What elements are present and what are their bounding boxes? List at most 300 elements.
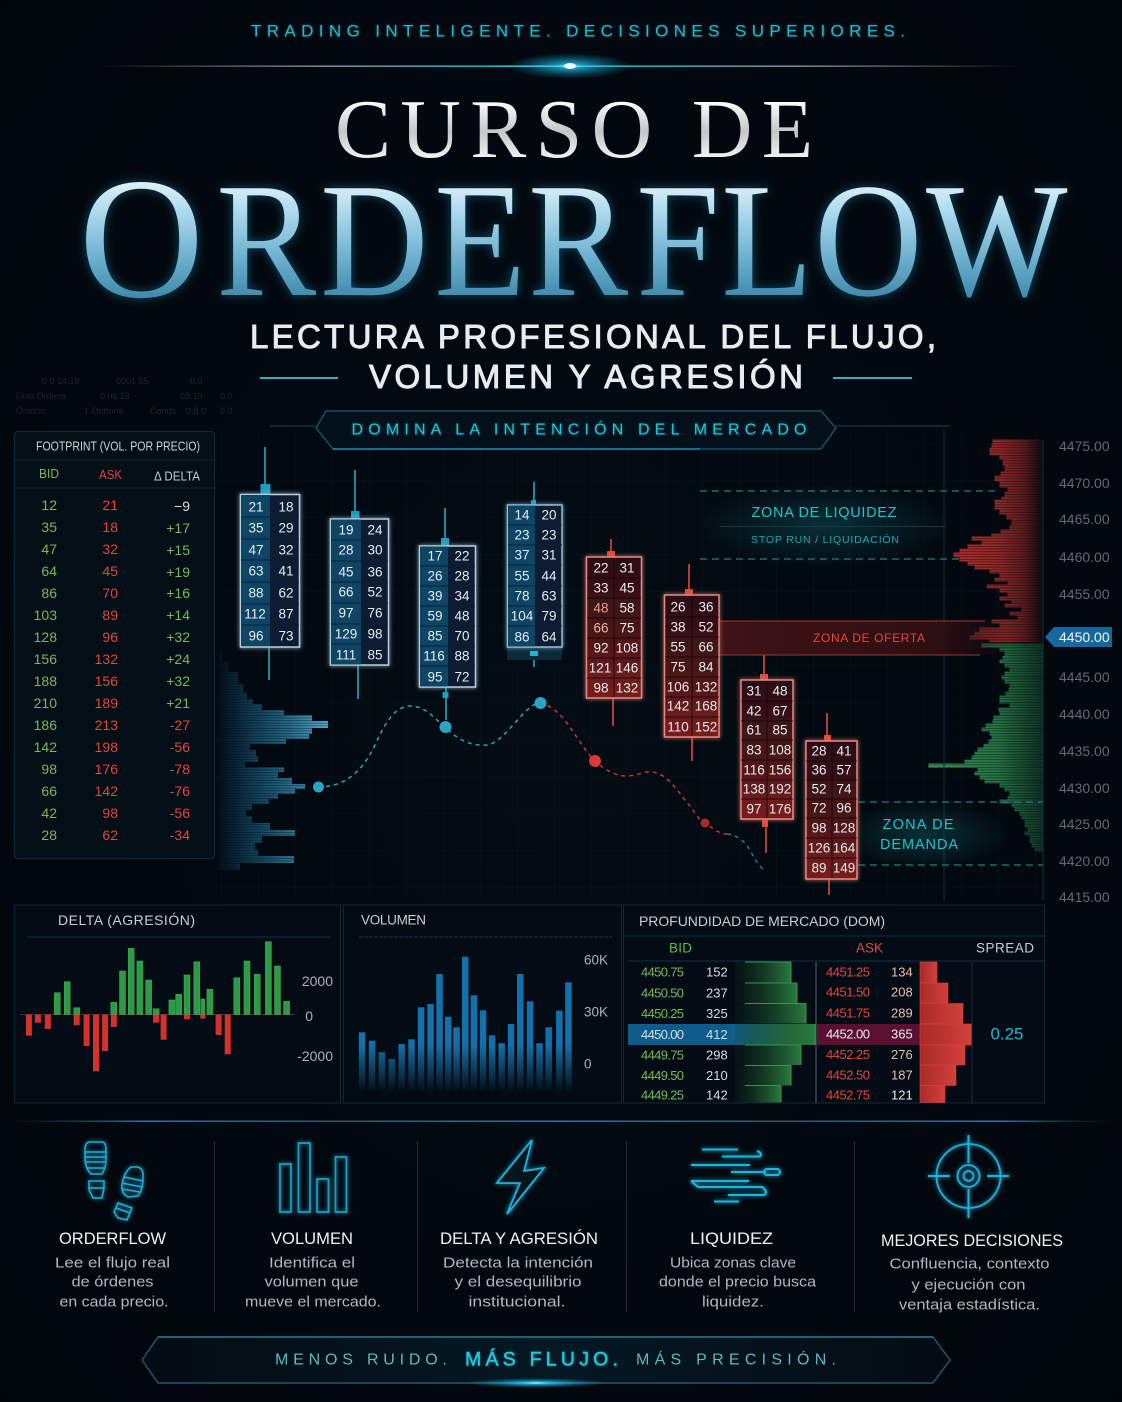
icon: footprints	[85, 1142, 143, 1220]
candle 5: 132	[616, 680, 638, 696]
current price tag: 4450.00	[1059, 629, 1110, 645]
footprint rows: +19	[166, 564, 190, 580]
footprint rows: 70	[102, 585, 118, 601]
candle 2: 36	[367, 564, 383, 580]
candle 8: 89	[811, 860, 827, 876]
candle 7: 48	[772, 684, 788, 698]
candle 5: 121	[589, 660, 611, 676]
candle 1: 63	[248, 564, 264, 578]
title: orderflow	[79, 144, 1068, 334]
volumen description	[245, 1254, 381, 1310]
candle 6: 106	[667, 680, 689, 694]
orderflow description: de órdenes	[72, 1274, 154, 1290]
candle 4: 44	[541, 568, 557, 584]
candle 6: 168	[695, 698, 717, 714]
dom ask rows: 4452.75	[826, 1088, 870, 1102]
footprint rows: +32	[166, 673, 190, 689]
footprint rows: 103	[34, 607, 57, 623]
bottom banner: MÁS FLUJO.	[465, 1348, 618, 1370]
candle 3: 85	[427, 628, 443, 644]
footprint rows: +24	[166, 651, 190, 667]
candle 8: 126	[808, 840, 830, 856]
candle 5	[586, 539, 642, 726]
right volume profile: supply	[954, 440, 1043, 642]
candle 5: 33	[593, 580, 609, 596]
candle 7: 156	[769, 762, 791, 778]
candle 3: 70	[454, 628, 470, 644]
footprint rows: 21	[102, 497, 118, 513]
candle 5: 58	[619, 600, 635, 616]
faint background ghost table: 0 ns 13	[100, 391, 130, 401]
subtitle: VOLUMEN Y AGRESIÓN	[369, 358, 803, 395]
candle 6: 75	[670, 660, 686, 674]
candle 2: 129	[335, 626, 357, 642]
candle 2: 19	[338, 522, 354, 538]
dom ask rows: 208	[891, 984, 913, 1000]
candle 2	[330, 470, 388, 699]
candle 3: 48	[454, 608, 470, 624]
candle 1: 62	[278, 586, 294, 600]
delta heading: DELTA Y AGRESIÓN	[440, 1229, 598, 1248]
volume axis labels: 0	[584, 1056, 592, 1072]
candle 1: 87	[278, 606, 294, 622]
footprint rows: -56	[170, 739, 190, 755]
footprint rows: 188	[34, 673, 57, 689]
panel: delta	[14, 905, 340, 1103]
candle 1: 41	[278, 564, 294, 578]
orderflow description: Lee el flujo real	[55, 1254, 170, 1272]
candle 8: 36	[811, 762, 827, 778]
icon: liquidity streaks	[691, 1150, 780, 1202]
banner: domina la intencion: DOMINA LA INTENCIÓN DEL MERCADO	[352, 420, 807, 438]
candle 6: 66	[698, 640, 714, 654]
footprint rows: -76	[170, 783, 190, 799]
footprint rows: 32	[102, 541, 118, 557]
zone: oferta: ZONA DE OFERTA	[813, 631, 925, 645]
candle 8: 164	[833, 840, 856, 856]
price axis labels: 4455.00	[1059, 586, 1110, 602]
candle 2: 30	[367, 542, 383, 558]
bottom banner: MÁS PRECISIÓN.	[636, 1350, 836, 1368]
candle 7: 176	[769, 802, 791, 816]
candle 8: 52	[811, 782, 827, 796]
faint background ghost table: Onidon	[16, 406, 45, 416]
dom ask rows: 134	[891, 964, 913, 980]
price axis labels: 4445.00	[1059, 669, 1110, 685]
footprint rows: 189	[95, 695, 118, 711]
footprint rows: 86	[41, 585, 57, 601]
volumen description: volumen que	[264, 1274, 358, 1290]
dom ask rows: 276	[891, 1047, 913, 1062]
candle 7: 108	[769, 742, 791, 758]
faint background ghost table: 0.0	[190, 376, 203, 386]
candle 2: 24	[367, 522, 383, 538]
candle 3: 22	[454, 548, 470, 564]
candle 6: 110	[667, 720, 689, 734]
candle 1: 47	[248, 542, 264, 558]
volumen heading: VOLUMEN	[361, 912, 426, 928]
subtitle	[250, 318, 936, 395]
dom ask rows: 4452.50	[826, 1068, 870, 1082]
title: orderflow: O	[814, 149, 923, 330]
candle 8: 72	[811, 800, 827, 816]
footprint rows: 45	[102, 563, 118, 579]
candle 6	[664, 564, 719, 761]
candle 4: 23	[514, 528, 530, 542]
delta description: institucional.	[468, 1294, 566, 1310]
footprint rows: 89	[102, 607, 118, 623]
price axis line	[944, 430, 1043, 900]
dom ask rows: 4451.25	[826, 964, 870, 980]
footprint rows: 35	[41, 519, 57, 535]
volumen heading: VOLUMEN	[271, 1230, 353, 1248]
dom ask rows: 4452.00	[826, 1026, 870, 1042]
candle 8: 74	[836, 782, 852, 796]
feature: orderflow	[55, 1142, 170, 1310]
footprint rows	[34, 497, 190, 843]
footprint rows: +17	[166, 520, 190, 536]
footprint column headers: BID	[39, 466, 59, 481]
title: orderflow: R	[528, 149, 629, 330]
footprint rows: 47	[41, 541, 57, 557]
dom bid rows: 4449.25	[641, 1088, 684, 1102]
candle 4: 31	[541, 548, 557, 562]
liquidez description	[659, 1254, 817, 1310]
zone: liquidez: STOP RUN / LIQUIDACIÓN	[751, 533, 899, 546]
dom bid rows: 210	[706, 1068, 728, 1083]
candle 4: 64	[541, 630, 557, 644]
candle 5: 98	[593, 680, 609, 696]
faint background ghost table: 0.0	[220, 406, 233, 416]
candle 8: 149	[833, 860, 855, 876]
delta red bars	[26, 1014, 231, 1071]
dom bid rows: 325	[706, 1006, 728, 1021]
right volume profile: demand	[929, 644, 1043, 851]
dom bid rows: 4450.75	[641, 964, 684, 980]
dom bid rows: 4450.25	[641, 1006, 684, 1021]
candle 1: 32	[278, 542, 294, 558]
bottom banner: MENOS RUIDO.	[275, 1352, 447, 1368]
zone: liquidez	[695, 483, 998, 567]
bid depth bars	[735, 962, 815, 1102]
candle 2: 97	[338, 606, 354, 620]
candle 6: 152	[695, 720, 717, 734]
banner: domina la intencion	[270, 411, 950, 449]
chart grid background	[215, 430, 1045, 900]
price axis labels: 4425.00	[1059, 816, 1110, 832]
mejores decisiones description: ventaja estadística.	[899, 1296, 1040, 1314]
candle 2: 28	[338, 542, 354, 558]
candle 1: 29	[278, 520, 294, 536]
footprint rows: 156	[34, 651, 57, 667]
footprint rows: 98	[41, 761, 57, 777]
faint background ghost table	[16, 376, 233, 416]
glowing top divider	[100, 53, 1020, 79]
price path: bullish dashed	[318, 703, 540, 787]
footprint rows: 213	[95, 717, 118, 733]
candle 4	[507, 482, 562, 667]
candle 5: 31	[619, 560, 635, 576]
volume axis labels: 60K	[584, 952, 608, 968]
feature: liquidez	[659, 1150, 817, 1310]
liquidez description: Ubica zonas clave	[670, 1254, 796, 1272]
liquidez heading: LIQUIDEZ	[690, 1230, 773, 1248]
faint background ghost table: 1 Oottons	[84, 406, 124, 416]
candle 4: 20	[541, 508, 557, 522]
zone: demanda: ZONA DE	[882, 817, 954, 833]
title: orderflow: D	[320, 149, 428, 330]
candle 5: 48	[593, 600, 609, 616]
footprint column headers: Δ DELTA	[154, 468, 200, 484]
candle 2: 85	[367, 648, 383, 662]
candle 8: 128	[833, 820, 855, 836]
candle 1: 73	[278, 628, 294, 644]
highlighted row	[628, 1024, 972, 1045]
candle 3: 28	[454, 568, 470, 584]
candle 7	[741, 655, 793, 853]
dom ask rows: 4451.50	[826, 984, 870, 1000]
bid bar edges	[745, 962, 815, 1102]
volumen description: mueve el mercado.	[245, 1294, 381, 1310]
liquidez description: donde el precio busca	[659, 1274, 817, 1290]
panel: footprint table	[14, 432, 214, 858]
delta axis labels: 0	[305, 1008, 313, 1024]
top tagline: TRADING INTELIGENTE. DECISIONES SUPERIORES.	[251, 22, 905, 40]
candle 1: 21	[248, 500, 264, 514]
footprint rows: 96	[102, 629, 118, 645]
dom bid rows: 4450.00	[641, 1027, 684, 1042]
candle 6: 26	[670, 600, 686, 614]
footprint rows: 198	[95, 739, 118, 755]
mejores decisiones description: Confluencia, contexto	[890, 1256, 1050, 1272]
title: orderflow: R	[216, 149, 317, 330]
footprint rows: -34	[170, 827, 190, 843]
title: orderflow: W	[926, 149, 1068, 330]
candle 4: 55	[514, 568, 530, 584]
candle 5: 66	[593, 620, 609, 636]
candle 3: 95	[427, 670, 443, 684]
candle 5: 75	[619, 620, 635, 636]
candle 8	[806, 713, 857, 895]
candle 2: 111	[336, 648, 356, 662]
candle 5: 92	[593, 640, 609, 656]
candle 6: 52	[698, 620, 714, 634]
footprint rows: 210	[34, 695, 57, 711]
candle 1: 18	[278, 500, 294, 514]
candle 7: 61	[746, 722, 762, 738]
orderflow description: en cada precio.	[60, 1294, 168, 1310]
footprint rows: +32	[166, 629, 190, 645]
delta description: y el desequilibrio	[454, 1274, 582, 1290]
delta green bars	[54, 942, 290, 1014]
panel: volumen	[344, 905, 622, 1103]
zone: liquidez: ZONA DE LIQUIDEZ	[752, 505, 897, 521]
price axis labels: 4465.00	[1059, 511, 1110, 527]
footprint rows: +16	[166, 585, 190, 601]
candle 1: 112	[244, 606, 266, 622]
bottom banner	[142, 1337, 950, 1388]
candle 4: 37	[514, 548, 530, 562]
mejores decisiones description	[890, 1256, 1050, 1314]
faint background ghost table: 0:8 0	[186, 406, 206, 416]
candle 4: 63	[541, 588, 557, 604]
feature column dividers	[214, 1141, 854, 1312]
candle 2: 66	[338, 584, 354, 600]
footprint rows: −9	[174, 498, 190, 514]
left volume profile	[215, 654, 328, 870]
price path: bearish dashed	[540, 703, 727, 834]
dom bid rows: 237	[706, 986, 728, 1000]
dom column headers: BID	[669, 940, 692, 956]
candle 6: 84	[698, 660, 714, 674]
features divider	[10, 1120, 1112, 1122]
icon: lightning bolt	[497, 1140, 544, 1214]
dom bid rows: 298	[706, 1048, 728, 1062]
candle 2: 45	[338, 564, 354, 580]
liquidez description: liquidez.	[702, 1294, 764, 1310]
title: curso de: CURSO DE	[335, 83, 813, 176]
delta axis labels: 2000	[302, 973, 333, 989]
left profile fine scan lines	[215, 654, 330, 870]
footprint rows: 18	[102, 519, 118, 535]
feature: volumen	[245, 1143, 381, 1310]
feature: mejores decisiones	[881, 1135, 1063, 1314]
candle 8: 41	[836, 744, 852, 758]
current price tag	[1045, 627, 1112, 647]
subtitle accent lines	[260, 377, 912, 379]
price axis labels: 4420.00	[1059, 853, 1110, 869]
zone: demanda	[840, 800, 1043, 870]
title: orderflow: F	[636, 149, 720, 330]
volume bars	[359, 957, 572, 1093]
candle 4: 104	[511, 608, 534, 624]
price axis labels: 4415.00	[1059, 889, 1110, 905]
candle 4: 23	[541, 528, 557, 542]
footprint heading: FOOTPRINT (VOL. POR PRECIO)	[36, 438, 200, 454]
price path nodes	[313, 697, 710, 828]
orderflow heading: ORDERFLOW	[59, 1230, 166, 1248]
candle 3	[420, 508, 476, 720]
dom bid rows: 152	[706, 964, 728, 980]
candle 4: 14	[514, 508, 530, 522]
footprint rows: 64	[41, 563, 57, 579]
dom ask rows: 289	[891, 1006, 913, 1020]
price axis labels: 4460.00	[1059, 549, 1110, 565]
dom bid rows	[641, 964, 728, 1102]
delta axis labels: -2000	[297, 1048, 333, 1064]
candle 3: 116	[423, 648, 445, 664]
candle 5: 22	[593, 560, 609, 576]
candle 4: 79	[541, 608, 557, 624]
footprint rows: 156	[95, 673, 118, 689]
dom column headers	[669, 940, 1034, 956]
volume axis labels: 30K	[584, 1004, 608, 1020]
candle 7: 67	[772, 704, 788, 718]
candle 6: 132	[695, 680, 717, 694]
candle 7: 31	[746, 684, 762, 698]
candle 1: 88	[248, 586, 264, 600]
footprint rows: 12	[41, 497, 57, 513]
footprint rows: 42	[41, 805, 57, 821]
candle 2: 52	[367, 584, 383, 600]
volumen description: Identifica el	[269, 1254, 355, 1272]
delta description	[443, 1254, 593, 1310]
candle 3: 88	[454, 648, 470, 664]
candle 3: 72	[454, 670, 470, 684]
delta axis labels	[297, 973, 333, 1064]
footprint rows: +14	[166, 607, 190, 623]
title: orderflow: L	[721, 149, 813, 330]
title: orderflow: O	[79, 144, 204, 334]
candle 3: 26	[427, 568, 443, 584]
faint background ghost table: 0001 55	[116, 376, 149, 386]
candle 7: 116	[743, 762, 765, 778]
subtitle: LECTURA PROFESIONAL DEL FLUJO,	[250, 318, 936, 355]
footprint rows: 62	[102, 827, 118, 843]
footprint rows: 142	[34, 739, 57, 755]
candle 1: 35	[248, 520, 264, 536]
dom bid rows: 142	[706, 1088, 728, 1102]
candle 8: 98	[811, 820, 827, 836]
candle 1	[240, 447, 300, 680]
candle 7: 42	[746, 704, 762, 718]
price axis labels: 4440.00	[1059, 706, 1110, 722]
dom bid rows: 412	[706, 1027, 728, 1042]
zone: oferta	[720, 621, 1005, 655]
candle 8: 28	[811, 744, 827, 758]
price axis labels	[1059, 438, 1110, 905]
footprint rows: -27	[170, 717, 190, 733]
dom ask rows: 121	[891, 1088, 913, 1102]
price axis labels: 4475.00	[1059, 438, 1110, 454]
delta description: Detecta la intención	[443, 1254, 593, 1272]
candle 5: 146	[616, 660, 638, 676]
feature: delta y agresion	[440, 1140, 598, 1310]
spread value: 0.25	[990, 1024, 1024, 1044]
candle 3: 59	[427, 608, 443, 624]
orderflow description	[55, 1254, 170, 1310]
faint background ghost table: 0 0 14:18	[42, 376, 80, 386]
candle 7: 85	[772, 722, 788, 738]
candle 2: 76	[367, 606, 383, 620]
footprint column headers: ASK	[99, 467, 122, 482]
price axis labels: 4430.00	[1059, 780, 1110, 796]
footprint rows: 176	[95, 761, 118, 777]
footprint rows: +21	[166, 695, 190, 711]
candle 3: 17	[427, 548, 443, 564]
icon: bars	[280, 1143, 346, 1212]
candle 1: 96	[248, 628, 264, 644]
panel: depth of market	[624, 905, 1044, 1103]
candle 3: 39	[427, 588, 443, 604]
footprint column headers	[39, 466, 200, 484]
candle 5: 108	[616, 640, 638, 656]
footprint rows: 132	[95, 651, 118, 667]
footprint rows: +15	[166, 542, 190, 558]
dom ask rows	[826, 964, 913, 1102]
right profile fine scan lines	[929, 440, 1043, 852]
candle 7: 138	[743, 782, 765, 796]
dom ask rows: 365	[891, 1026, 913, 1042]
candle 7: 97	[746, 802, 762, 816]
candle 8: 96	[836, 800, 852, 816]
price axis labels: 4435.00	[1059, 743, 1110, 759]
candle 4: 78	[514, 588, 530, 604]
title: orderflow: E	[434, 149, 526, 330]
faint background ghost table: 0.0	[220, 391, 233, 401]
dom column headers: SPREAD	[976, 940, 1034, 956]
footprint rows: -78	[170, 761, 190, 777]
